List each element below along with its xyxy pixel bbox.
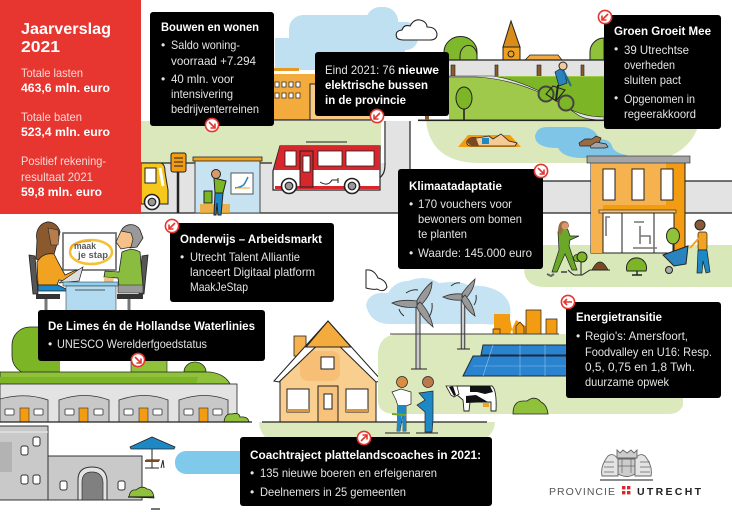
panel: elektrische bussen bbox=[315, 52, 449, 123]
financial figures bbox=[21, 66, 110, 199]
panel: Klimaatadaptatie: Waarde: 145.000 euro bbox=[418, 246, 532, 260]
logo wordmark: PROVINCIE bbox=[549, 486, 615, 498]
bus stop sign bbox=[171, 153, 186, 213]
panel: Onderwijs - Arbeidsmarkt: Onderwijs – Arbeidsmarkt bbox=[180, 232, 322, 246]
panel: Klimaatadaptatie: • bbox=[409, 197, 413, 211]
maak je stap logo bbox=[74, 241, 109, 260]
panel: Bouwen en wonen: • bbox=[161, 38, 165, 52]
bus shelter bbox=[193, 157, 262, 215]
panel: Bouwen en wonen bbox=[150, 12, 274, 132]
financial figures: 523,4 mln. euro bbox=[21, 125, 110, 139]
panel: Groen Groeit Mee: overheden bbox=[624, 58, 675, 72]
panel: Onderwijs - Arbeidsmarkt bbox=[165, 219, 334, 302]
light green energy field bbox=[378, 334, 683, 414]
panel: De Limes: • bbox=[48, 337, 52, 351]
fort with green roof bbox=[0, 327, 252, 422]
panel: Onderwijs - Arbeidsmarkt: • bbox=[180, 250, 184, 264]
financial figures: 59,8 mln. euro bbox=[21, 185, 102, 199]
road bbox=[141, 121, 732, 213]
panel: Klimaatadaptatie: • bbox=[409, 246, 413, 260]
panel: Groen Groeit Mee: • bbox=[614, 42, 618, 56]
panel: Energietransitie bbox=[561, 295, 721, 398]
panel title: 2021 bbox=[21, 39, 60, 56]
panel: Onderwijs - Arbeidsmarkt: lanceert Digitaal platform bbox=[190, 265, 315, 279]
parasol and terrace bbox=[130, 437, 175, 468]
panel title: Jaarverslag bbox=[21, 21, 111, 38]
panel: Klimaatadaptatie bbox=[398, 164, 548, 269]
outline cloud lower bbox=[366, 270, 387, 291]
education illustration bbox=[29, 222, 148, 311]
panel: Klimaatadaptatie: te planten bbox=[418, 227, 467, 241]
panel: Energietransitie: Energietransitie bbox=[576, 310, 662, 324]
logo wordmark bbox=[549, 486, 702, 498]
panel: Coachtraject: • bbox=[250, 485, 254, 499]
panel: Groen Groeit Mee bbox=[598, 10, 721, 129]
green hill with path bbox=[418, 76, 604, 121]
orange town bbox=[390, 310, 559, 334]
park bbox=[426, 120, 700, 163]
panel: Groen Groeit Mee: sluiten pact bbox=[624, 73, 682, 87]
panel: Klimaatadaptatie: bewoners om bomen bbox=[418, 212, 522, 226]
panel: De Limes: De Limes én de Hollandse Waterlinies bbox=[48, 319, 255, 333]
panel: Groen Groeit Mee: 39 Utrechtse bbox=[624, 43, 689, 57]
panel: Bouwen en wonen: • bbox=[161, 72, 165, 86]
cloud outline bbox=[396, 20, 437, 40]
panel: Groen Groeit Mee: Opgenomen in bbox=[624, 92, 695, 106]
sky clouds bbox=[275, 7, 418, 70]
red bus bbox=[273, 142, 380, 194]
panel title bbox=[21, 21, 111, 56]
panel: Coachtraject: Coachtraject plattelandscoaches in 2021: bbox=[250, 448, 481, 462]
panel: Groen Groeit Mee: • bbox=[614, 91, 618, 105]
yellow bus bbox=[141, 163, 168, 210]
panel: Energietransitie: duurzame opwek bbox=[585, 375, 670, 389]
panel: Energietransitie: 0,5, 0,75 en 1,8 Twh. bbox=[585, 360, 695, 374]
panel: De Limes bbox=[38, 310, 265, 367]
maak je stap logo: je stap bbox=[77, 250, 109, 260]
financial figures: Totale baten bbox=[21, 110, 82, 124]
solar panels bbox=[463, 345, 570, 376]
red panel bbox=[0, 0, 141, 214]
panel: Groen Groeit Mee: regeerakkoord bbox=[624, 107, 696, 121]
panel: elektrische bussen: nieuwe bbox=[398, 63, 439, 77]
light green field left bbox=[141, 121, 381, 163]
panel: Coachtraject: Deelnemers in 25 gemeenten bbox=[260, 485, 406, 499]
panel: Coachtraject: 135 nieuwe boeren en erfeigenaren bbox=[260, 466, 437, 480]
windmills bbox=[392, 279, 476, 369]
panel: Klimaatadaptatie: 170 vouchers voor bbox=[418, 197, 512, 211]
panel: Energietransitie: Foodvalley en U16: Resp. bbox=[585, 345, 712, 359]
green ground right bbox=[524, 245, 732, 287]
panel: Bouwen en wonen: 40 mln. voor bbox=[171, 72, 234, 86]
logo: Provincie Utrecht bbox=[549, 450, 702, 498]
pond lower bbox=[175, 451, 255, 474]
logo wordmark: UTRECHT bbox=[637, 486, 702, 498]
financial figures: Totale lasten bbox=[21, 66, 83, 80]
blue cloud wind farm bbox=[366, 278, 510, 324]
green under house bbox=[259, 422, 495, 445]
panel: Bouwen en wonen: voorraad +7.294 bbox=[171, 54, 256, 68]
planting people bbox=[547, 220, 710, 276]
bush bbox=[513, 398, 548, 414]
panel: Bouwen en wonen: Saldo woning- bbox=[171, 38, 240, 52]
panel: elektrische bussen: elektrische bussen bbox=[325, 78, 428, 92]
panel: Coachtraject: • bbox=[250, 466, 254, 480]
panel: Onderwijs - Arbeidsmarkt: MaakJeStap bbox=[190, 280, 248, 294]
panel: Onderwijs - Arbeidsmarkt: Utrecht Talent Alliantie bbox=[190, 250, 300, 264]
panel: Coachtraject bbox=[240, 431, 492, 506]
financial figures: resultaat 2021 bbox=[21, 170, 93, 184]
lower castle bbox=[0, 426, 160, 509]
trees, church and wall bbox=[444, 21, 604, 77]
financial figures: Positief rekening- bbox=[21, 154, 106, 168]
house bbox=[262, 321, 487, 422]
cyclist bbox=[538, 62, 574, 110]
panel: elektrische bussen: Eind 2021: 76 bbox=[325, 63, 395, 77]
panel: Energietransitie: • bbox=[576, 329, 580, 343]
maak je stap logo: maak bbox=[74, 241, 97, 251]
panel: Energietransitie: Regio's: Amersfoort, bbox=[585, 329, 688, 343]
financial figures: 463,6 mln. euro bbox=[21, 81, 110, 95]
panel: Klimaatadaptatie: Klimaatadaptatie bbox=[409, 179, 502, 193]
panel: Bouwen en wonen: bedrijventerreinen bbox=[171, 102, 259, 116]
two men bbox=[385, 376, 438, 433]
panel: De Limes: UNESCO Werelderfgoedstatus bbox=[57, 337, 207, 351]
orange building right bbox=[587, 156, 690, 253]
panel: Groen Groeit Mee: Groen Groeit Mee bbox=[614, 24, 711, 38]
cow bbox=[446, 386, 496, 411]
panel: Bouwen en wonen: Bouwen en wonen bbox=[161, 20, 259, 34]
orange office building bbox=[274, 68, 382, 120]
panel: elektrische bussen: in de provincie bbox=[325, 93, 406, 107]
panel: Bouwen en wonen: intensivering bbox=[171, 87, 233, 101]
